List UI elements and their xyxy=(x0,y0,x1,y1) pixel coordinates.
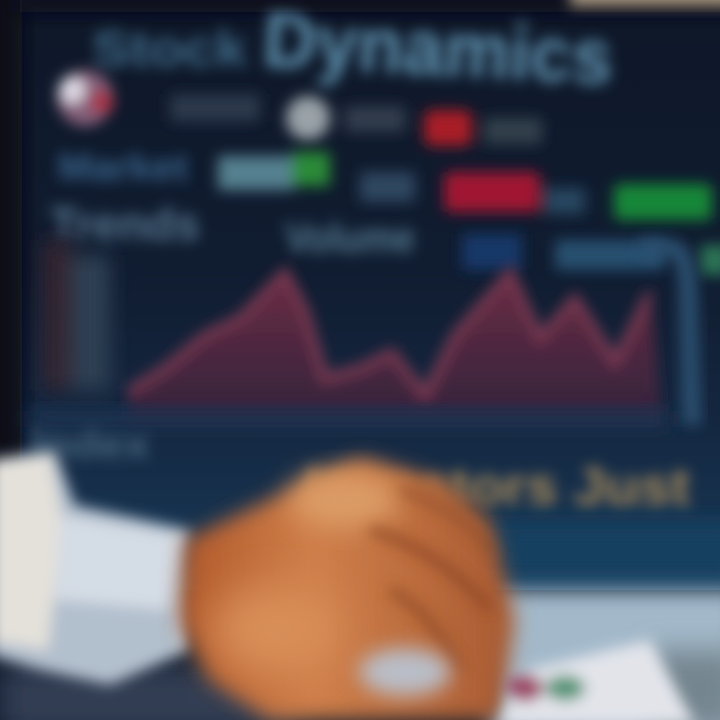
ticker row 2: Market xyxy=(58,147,188,189)
lower right gold label: Investors Just xyxy=(305,457,690,517)
chart baseline band xyxy=(30,410,670,428)
hand xyxy=(180,458,515,720)
title: Stock xyxy=(92,21,247,77)
ticker row 3: Trends xyxy=(50,198,200,250)
lower screen and desk xyxy=(0,522,720,720)
ticker row 2 xyxy=(58,147,712,220)
ticker row 3: Volume xyxy=(285,214,415,261)
ticker row 1 xyxy=(170,94,542,146)
chart frame right edge xyxy=(640,248,692,425)
shirt cuff xyxy=(0,450,190,685)
y axis labels xyxy=(42,240,110,390)
icon: flag badge xyxy=(57,70,114,126)
paper with colored chart xyxy=(500,640,695,720)
area chart xyxy=(128,272,662,420)
title xyxy=(92,0,615,101)
lower left label: Index xyxy=(30,423,150,467)
ticker row 3 xyxy=(50,198,720,275)
